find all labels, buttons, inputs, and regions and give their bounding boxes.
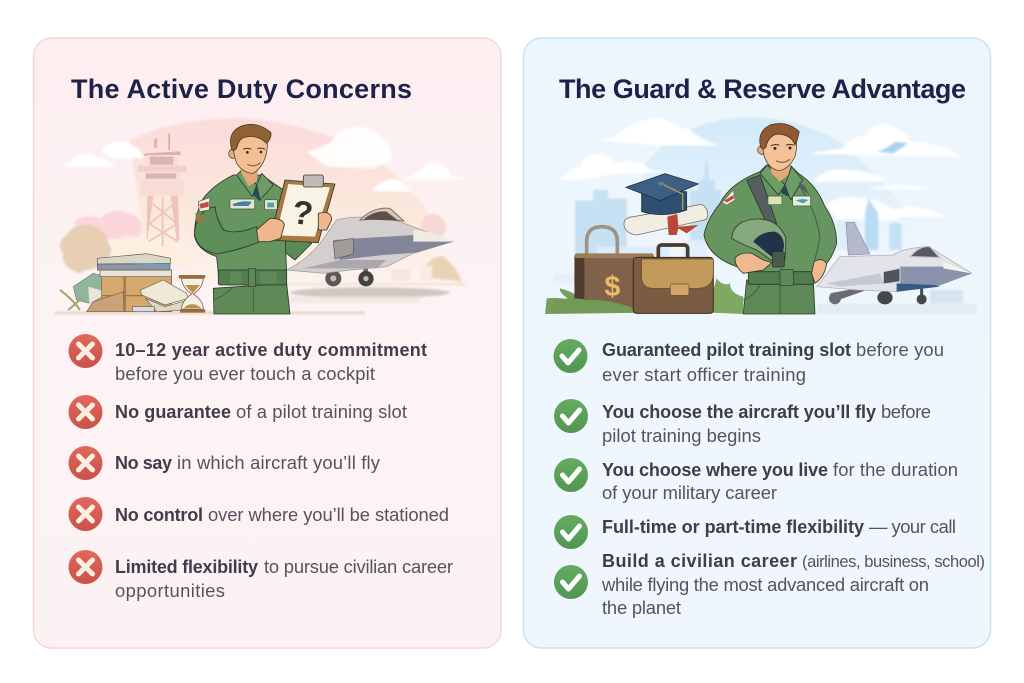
item: choose the aircraft: You choose the aircraft you’ll fly: [602, 402, 876, 422]
item: 10-12 year commitment: [68, 334, 427, 384]
item: build a civilian career: [554, 551, 985, 618]
icon: green check: [554, 458, 588, 492]
item: no say: [68, 446, 381, 480]
icon: red cross: [68, 334, 102, 368]
panel: active duty concerns: [34, 38, 501, 648]
hourglass: [179, 275, 205, 313]
money case and briefcase: [550, 227, 713, 313]
item: full-time or part-time flexibility: [554, 515, 956, 549]
item: choose where you live: [554, 458, 958, 503]
tree: [60, 225, 111, 273]
icon: red cross: [68, 395, 102, 429]
grass: [545, 278, 743, 314]
pilot: ?: [290, 194, 315, 234]
hands: [735, 253, 772, 273]
illustration: pilot with clipboard at airfield: [55, 118, 468, 314]
icon: red cross: [68, 497, 102, 531]
concerns list: [68, 334, 453, 601]
item: full-time or part-time flexibility: — your call: [869, 516, 956, 537]
control tower: [137, 133, 187, 247]
item: limited flexibility: [68, 550, 453, 601]
pilot: [194, 124, 335, 314]
item: limited flexibility: opportunities: [115, 580, 225, 601]
item: choose where you live: of your military career: [602, 482, 777, 503]
background sky and clouds: [55, 118, 468, 314]
item: no guarantee: No guarantee: [115, 402, 231, 422]
neck and head: [240, 167, 258, 186]
item: 10-12 year commitment: before you ever touch a cockpit: [115, 363, 375, 384]
item: full-time or part-time flexibility: Full-time or part-time flexibility: [602, 517, 864, 537]
icon: green check: [554, 399, 588, 433]
pilot: [704, 123, 837, 314]
hands: [257, 218, 284, 242]
item: choose where you live: for the duration: [833, 459, 958, 480]
item: no control: [68, 497, 449, 531]
background sky and city: [553, 118, 977, 314]
item: guaranteed pilot training slot: ever start officer training: [602, 364, 806, 385]
panel: guard and reserve advantage: [524, 38, 990, 648]
item: no say: in which aircraft you’ll fly: [177, 452, 381, 473]
item: guaranteed pilot training slot: Guaranteed pilot training slot: [602, 340, 851, 360]
item: build a civilian career: while flying the most advanced aircraft on: [601, 574, 929, 595]
helmet: [732, 219, 786, 262]
item: limited flexibility: to pursue civilian career: [264, 556, 453, 577]
item: limited flexibility: Limited flexibility: [115, 557, 258, 577]
item: no guarantee: of a pilot training slot: [236, 401, 407, 422]
graduation cap and diploma: [624, 174, 708, 235]
illustration: pilot with helmet, briefcases and jet: [545, 118, 977, 314]
icon: green check: [554, 565, 588, 599]
item: no control: over where you’ll be stationed: [208, 504, 449, 525]
item: build a civilian career: the planet: [602, 597, 681, 618]
item: choose the aircraft: pilot training begins: [602, 425, 761, 446]
item: no control: No control: [115, 505, 203, 525]
jet: [287, 208, 453, 286]
jet: [817, 222, 972, 304]
heading: the guard and reserve advantage: The Guard & Reserve Advantage: [559, 74, 966, 104]
clipboard: [269, 180, 335, 243]
item: guaranteed pilot training slot: before you: [856, 339, 944, 360]
neck and head: [769, 160, 792, 182]
money case and briefcase: $: [604, 271, 620, 303]
item: no say: No say: [115, 453, 172, 473]
item: guaranteed pilot training slot: [554, 339, 944, 385]
item: build a civilian career: Build a civilian career: [602, 551, 797, 571]
item: choose where you live: You choose where you live: [602, 460, 828, 480]
item: choose the aircraft: [554, 399, 931, 446]
item: choose the aircraft: before: [881, 401, 931, 422]
item: no guarantee: [68, 395, 407, 429]
icon: green check: [554, 339, 588, 373]
icon: green check: [554, 515, 588, 549]
heading: the active duty concerns: The Active Duty Concerns: [71, 74, 412, 104]
advantages list: [554, 339, 985, 618]
ground: [55, 312, 365, 314]
icon: red cross: [68, 446, 102, 480]
item: 10-12 year commitment: 10–12 year active duty commitment: [115, 340, 427, 360]
item: build a civilian career: (airlines, business, school): [802, 553, 985, 571]
books and boxes: [60, 254, 188, 312]
icon: red cross: [68, 550, 102, 584]
